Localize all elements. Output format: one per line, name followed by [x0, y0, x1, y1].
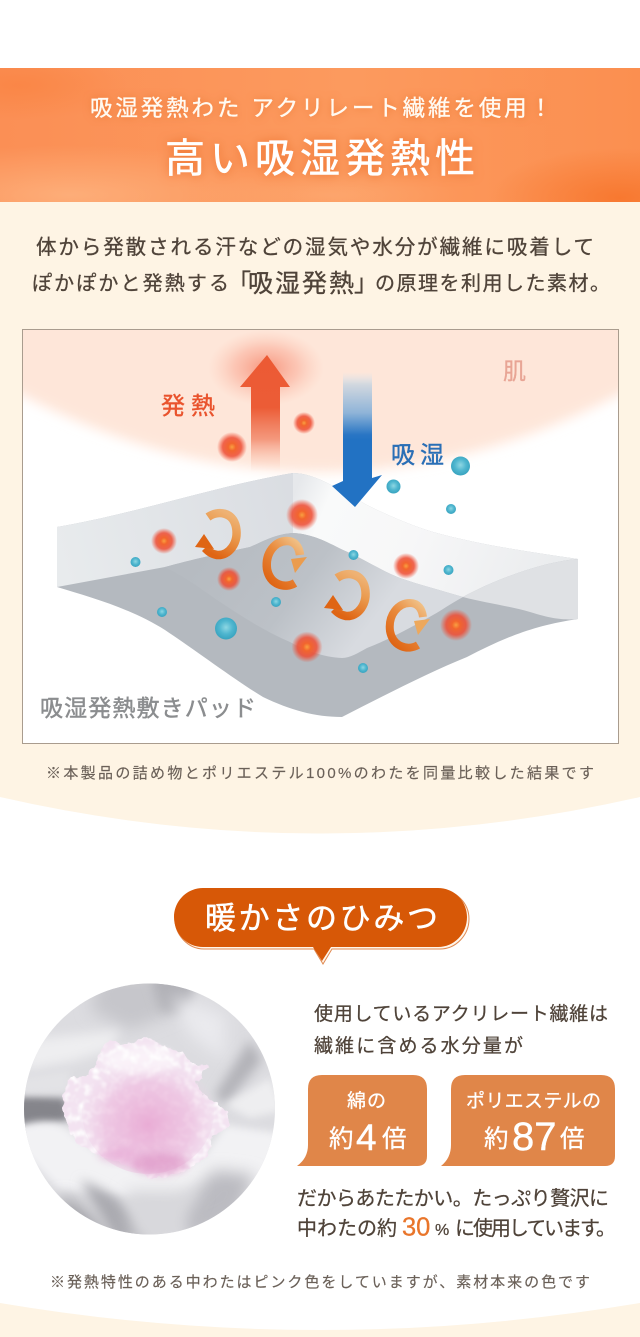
intro paragraph: の原理を利用した素材。	[375, 272, 610, 295]
label: heat generation: 発熱	[161, 393, 215, 420]
label: product name: 吸湿発熱敷きパッド	[40, 695, 256, 721]
diagram panel: moisture absorption and heat	[22, 329, 619, 744]
pad sheet	[57, 473, 578, 717]
arrow: moisture absorbing	[332, 372, 382, 507]
badge text: 暖かさのひみつ	[205, 901, 438, 936]
description text: 繊維に含める水分量が	[314, 1035, 523, 1057]
callout: polyester comparison: 倍	[560, 1125, 584, 1153]
header title: 高い吸湿発熱性	[165, 137, 475, 181]
conclusion text: %	[435, 1222, 449, 1239]
intro paragraph: 吸湿発熱	[248, 270, 354, 298]
footnote: colour of filling: ※発熱特性のある中わたはピンク色をしていますが、素材本来の色です	[50, 1274, 590, 1291]
callout: polyester comparison: 87	[512, 1115, 556, 1159]
moisture particles	[130, 456, 470, 673]
callout: polyester comparison: 約	[484, 1125, 508, 1153]
description text: 使用しているアクリレート繊維は	[314, 1003, 608, 1025]
badge: secret of warmth	[174, 888, 469, 964]
skin layer	[23, 330, 618, 476]
header banner	[0, 50, 640, 248]
intro paragraph: ぽかぽかと発熱する	[32, 272, 229, 295]
header subtitle: 吸湿発熱わた アクリレート繊維を使用！	[90, 96, 552, 121]
callout: cotton comparison: 倍	[382, 1125, 406, 1153]
conclusion text: だからあたたかい。たっぷり贅沢に	[297, 1187, 609, 1210]
heat glow	[216, 336, 316, 400]
footnote: comparison: ※本製品の詰め物とポリエステル100%のわたを同量比較した結果です	[46, 765, 594, 782]
bottom cream band	[0, 1303, 640, 1337]
callout: cotton comparison: 綿の	[347, 1090, 386, 1112]
conclusion text: 中わたの約	[297, 1217, 397, 1240]
heat particles	[151, 412, 472, 662]
swirl 3	[324, 574, 366, 616]
cream section background	[0, 202, 640, 834]
intro paragraph	[32, 236, 610, 298]
intro paragraph: 」	[354, 270, 378, 297]
callout: cotton comparison: 4	[356, 1117, 377, 1158]
callout: polyester comparison: ポリエステルの	[466, 1090, 601, 1112]
label: moisture absorption: 吸湿	[391, 442, 444, 469]
pink fibre cluster	[63, 1037, 229, 1178]
callout: cotton comparison: 約	[329, 1125, 354, 1153]
conclusion text: に使用しています。	[455, 1217, 616, 1240]
photo: pink heat-generating filling on white fabric	[24, 984, 275, 1234]
conclusion text	[297, 1187, 616, 1242]
intro paragraph: 体から発散される汗などの湿気や水分が繊維に吸着して	[36, 236, 594, 259]
swirl 1	[195, 513, 237, 555]
conclusion text: 30	[402, 1214, 430, 1242]
swirl 4	[390, 603, 430, 648]
callout: cotton comparison	[297, 1075, 427, 1166]
arrow: heat rising	[240, 355, 290, 472]
callout: polyester comparison	[441, 1075, 615, 1166]
label: skin: 肌	[503, 358, 526, 384]
description text	[314, 1003, 608, 1057]
swirl 2	[267, 541, 307, 586]
intro paragraph: 「	[227, 270, 251, 297]
